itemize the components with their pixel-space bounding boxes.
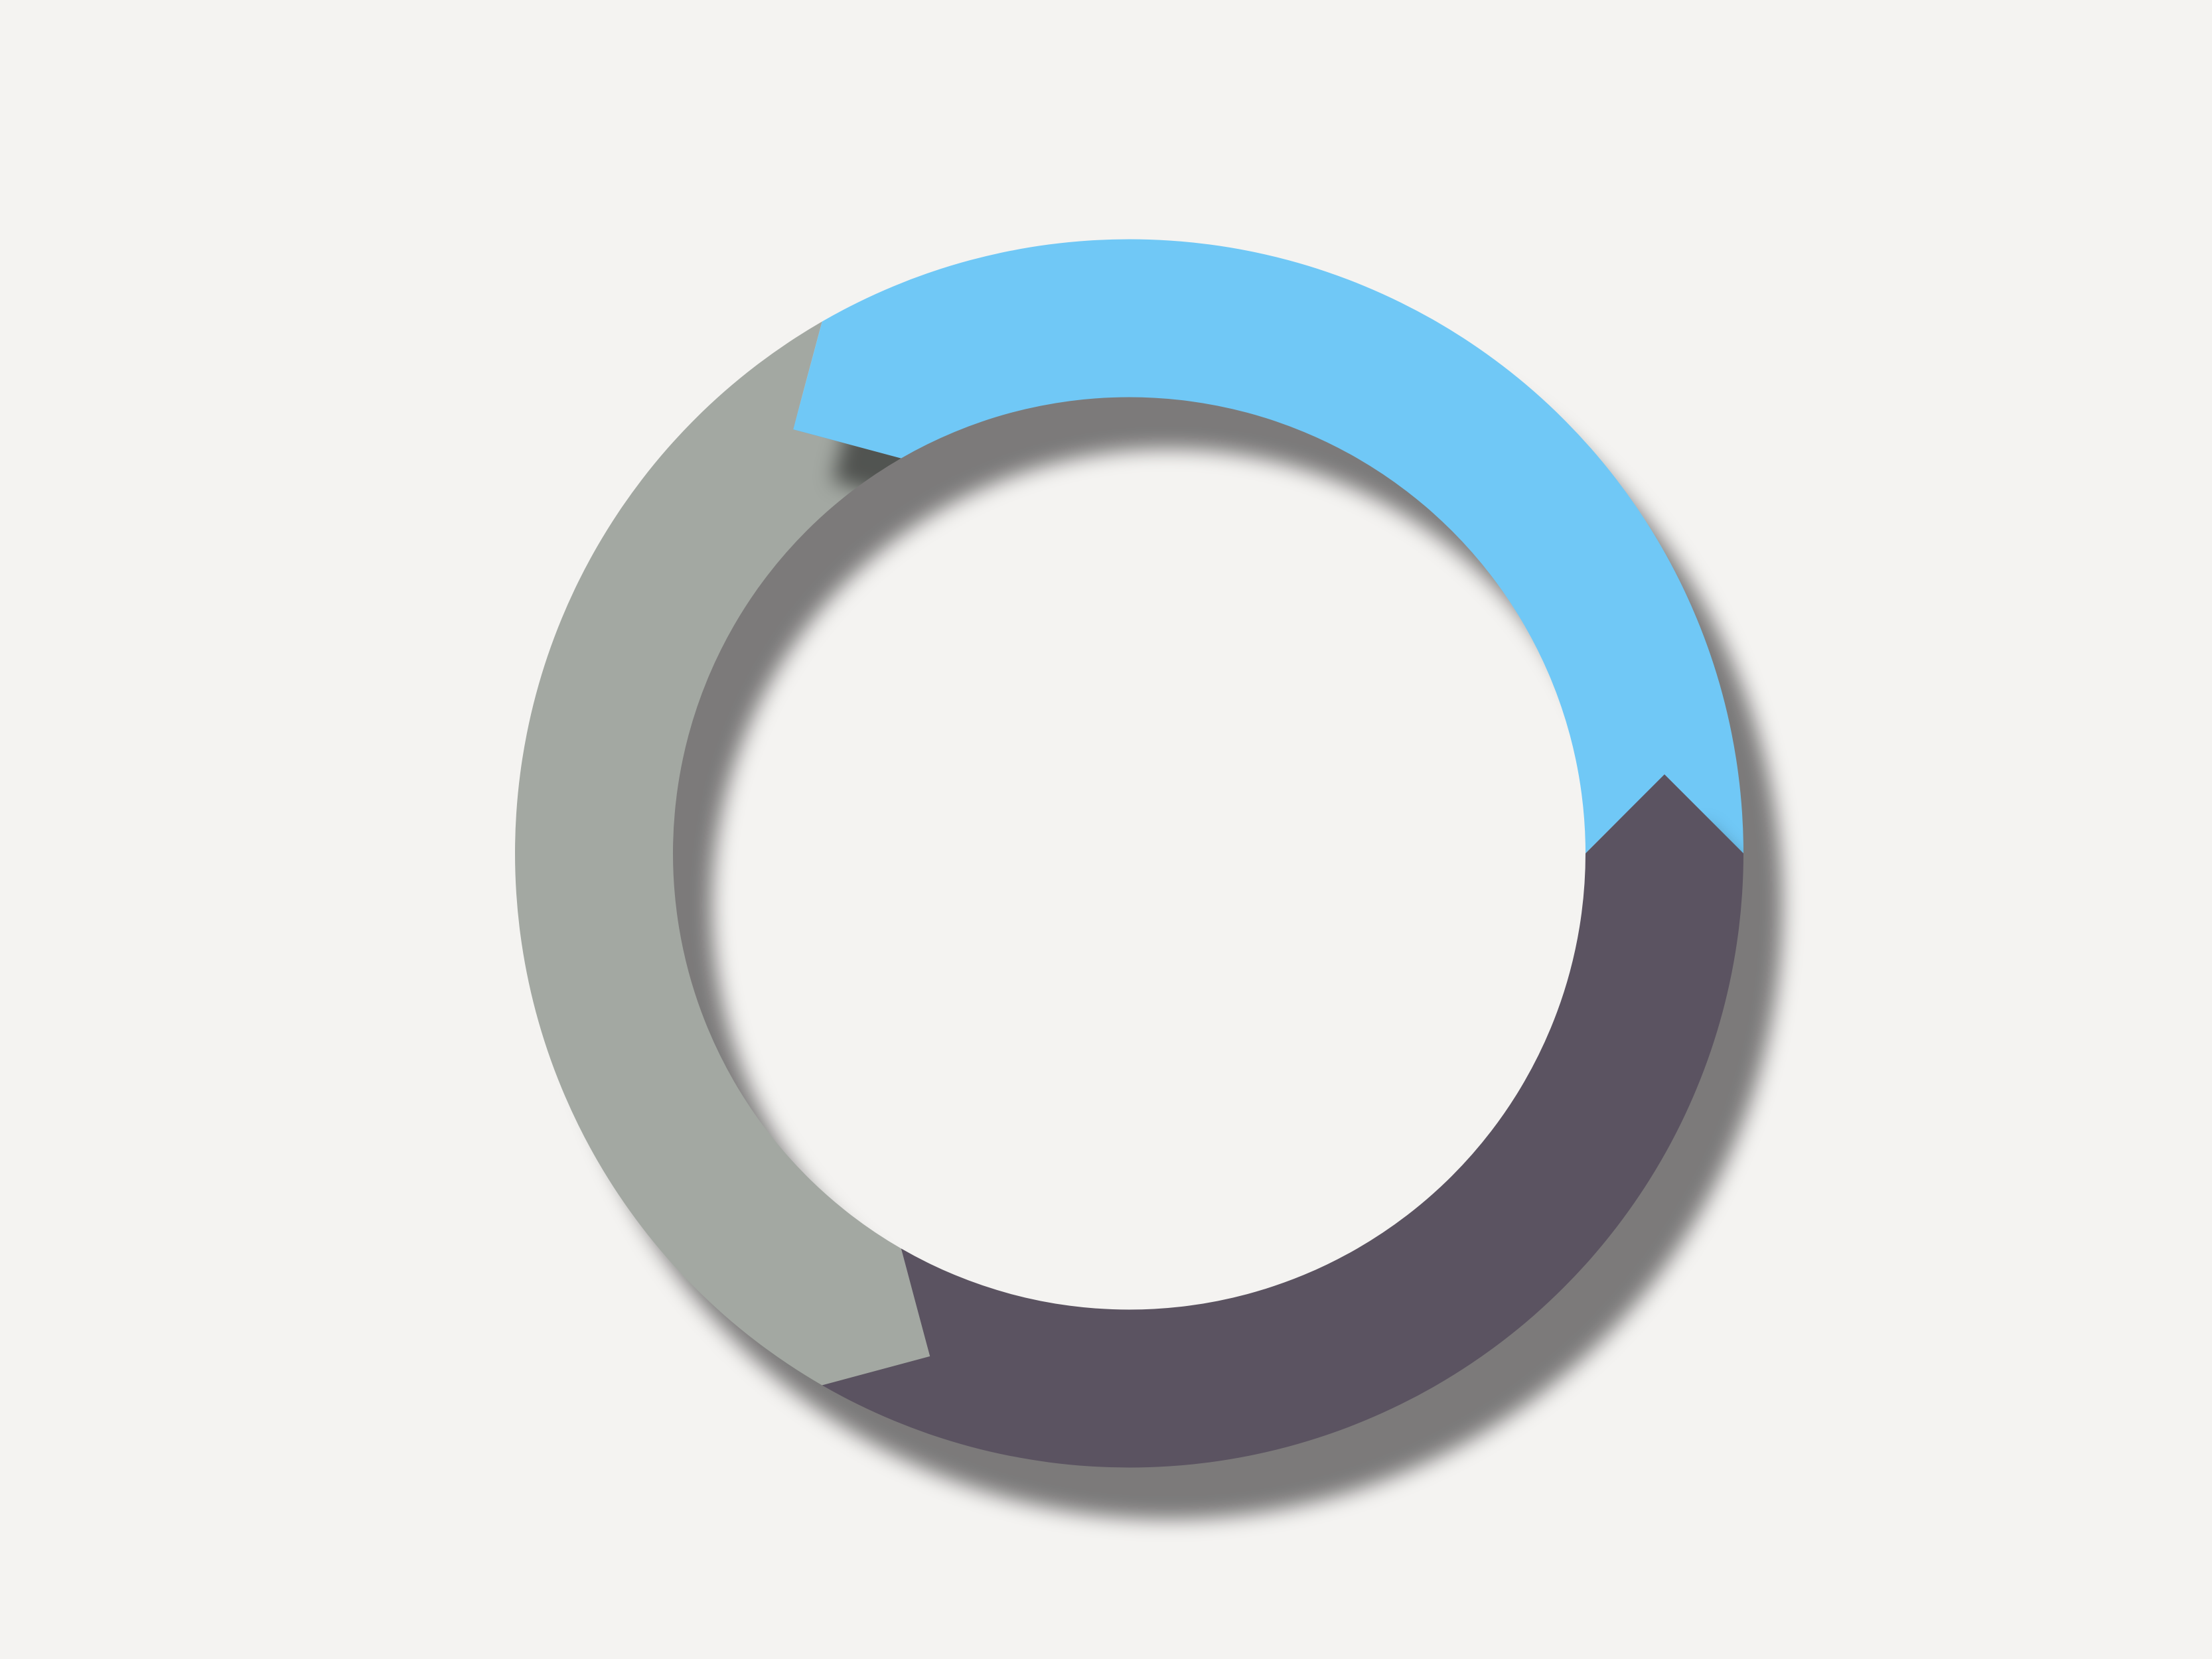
blue arrow shadow on grey segment bbox=[824, 439, 901, 496]
arrow segment: blue bbox=[793, 240, 1743, 853]
ring drop shadow bbox=[554, 291, 1783, 1520]
arrow segment: grey bbox=[515, 321, 930, 1386]
circular arrow ring bbox=[515, 240, 1783, 1520]
dark arrow shadow on blue segment bbox=[1708, 818, 1743, 853]
infographic canvas bbox=[515, 239, 1797, 1534]
arrow segment: dark purple bbox=[822, 774, 1743, 1467]
